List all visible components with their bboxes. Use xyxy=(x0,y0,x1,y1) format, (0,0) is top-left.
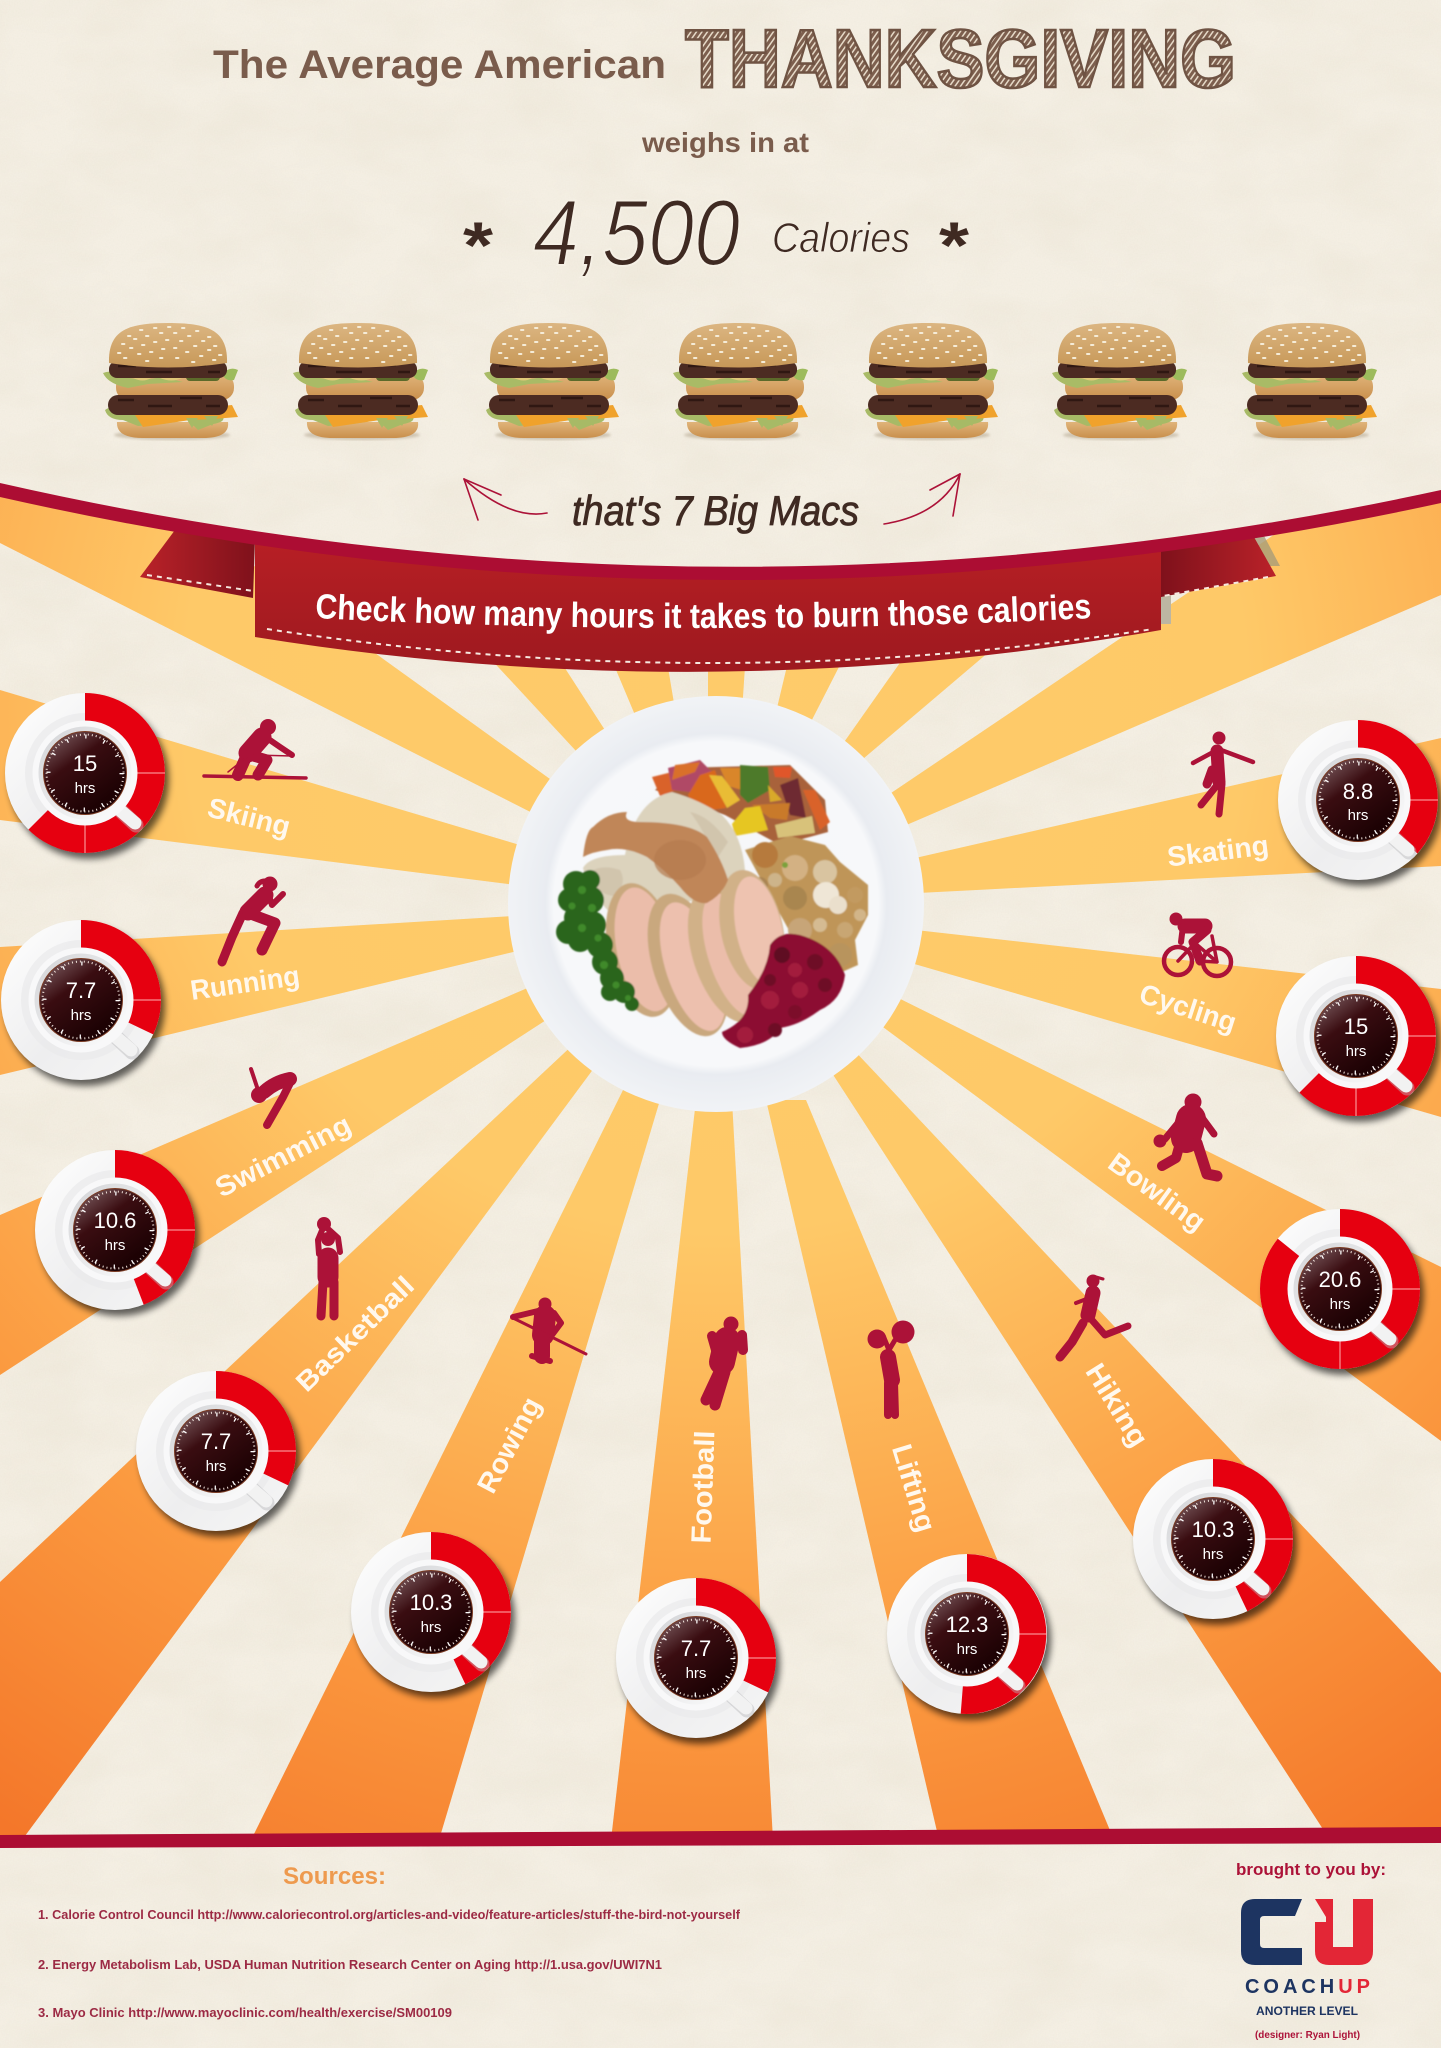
ribbon tail: right xyxy=(1161,530,1280,624)
calorie count xyxy=(463,180,969,285)
ribbon banner xyxy=(100,508,1320,672)
coffee cup gauge: 15 hrs xyxy=(1276,956,1440,1122)
icon: big mac 6 xyxy=(1052,323,1187,440)
panel: skating xyxy=(1165,720,1441,886)
mashed potatoes xyxy=(583,792,745,915)
arrow: left xyxy=(464,479,547,520)
panel: swimming xyxy=(35,1069,356,1316)
icon: basketball player xyxy=(317,1217,340,1316)
coffee cup gauge: 10.6 hrs: 10.6 xyxy=(94,1208,136,1233)
panel: basketball xyxy=(136,1217,420,1537)
label: Football: Football xyxy=(686,1430,720,1544)
ribbon main panel xyxy=(255,544,1161,672)
coffee cup gauge: 8.8 hrs xyxy=(1278,720,1441,886)
coffee cup gauge: 10.3 hrs xyxy=(1133,1459,1297,1625)
coffee cup gauge: 10.3 hrs: 10.3 xyxy=(410,1590,452,1615)
food photo group xyxy=(556,760,868,1048)
label: Skating: Skating xyxy=(1165,829,1271,873)
banner heading xyxy=(315,618,1092,628)
coffee cup gauge: 15 hrs: hrs xyxy=(1346,1043,1366,1060)
calorie count: Calories xyxy=(772,214,910,261)
calorie count: * xyxy=(939,208,969,282)
label: Bowling: Bowling xyxy=(1103,1147,1211,1237)
gravy xyxy=(583,812,728,903)
coffee cup gauge: 20.6 hrs: 20.6 xyxy=(1319,1267,1361,1292)
label: Rowing: Rowing xyxy=(471,1392,547,1498)
panel: skiing xyxy=(5,693,306,859)
coffee cup gauge: 10.3 hrs xyxy=(351,1532,515,1698)
turkey slices xyxy=(595,864,795,1046)
source 3: 3. Mayo Clinic http://www.mayoclinic.com/health/exercise/SM00109 xyxy=(38,2006,452,2020)
source 1: 1. Calorie Control Council http://www.caloriecontrol.org/articles-and-video/feature-articles/stuff-the-bird-not-yourself xyxy=(38,1908,741,1922)
parsley xyxy=(556,870,639,1011)
coffee cup gauge: 8.8 hrs: 8.8 xyxy=(1343,779,1373,804)
icon: runner xyxy=(222,876,283,962)
label: Skiing: Skiing xyxy=(204,792,294,842)
coffee cup gauge: 7.7 hrs xyxy=(1,920,165,1086)
icon: skier xyxy=(204,719,306,778)
icon: big mac 7 xyxy=(1242,323,1377,440)
icon: weightlifter xyxy=(868,1320,914,1415)
panel: bowling xyxy=(1103,1094,1424,1375)
label: Hiking: Hiking xyxy=(1079,1358,1155,1452)
brought to you by: brought to you by: xyxy=(1236,1860,1386,1879)
icon: football player xyxy=(706,1316,743,1405)
sources block xyxy=(38,1863,741,2020)
icon: big mac 4 xyxy=(673,323,808,440)
panel: running xyxy=(1,876,302,1086)
title: THANKSGIVING: THANKSGIVING xyxy=(685,12,1236,105)
coffee cup gauge: 7.7 hrs: hrs xyxy=(206,1458,226,1475)
ribbon banner: Check how many hours it takes to burn those calories xyxy=(316,594,1090,634)
coffee cup gauge: 12.3 hrs xyxy=(887,1554,1051,1720)
plate of thanksgiving food xyxy=(508,696,924,1112)
source 2: 2. Energy Metabolism Lab, USDA Human Nutrition Research Center on Aging http://1.usa.gov/UWI7N1 xyxy=(38,1958,662,1972)
coffee cup gauge: 7.7 hrs: hrs xyxy=(686,1665,706,1682)
icon: rower xyxy=(513,1298,586,1361)
icon: big mac 1 xyxy=(103,323,238,440)
coffee cup gauge: 15 hrs: 15 xyxy=(73,751,97,776)
bottom crimson bar xyxy=(0,1827,1441,1848)
panel: lifting xyxy=(868,1320,1051,1720)
designer credit: (designer: Ryan Light) xyxy=(1255,2029,1360,2041)
calorie count: 4,500 xyxy=(533,180,740,285)
coffee cup gauge: 20.6 hrs: hrs xyxy=(1330,1296,1350,1313)
coffee cup gauge: 10.3 hrs: hrs xyxy=(421,1619,441,1636)
coffee cup gauge: 15 hrs: hrs xyxy=(75,780,95,797)
coffee cup gauge: 12.3 hrs: hrs xyxy=(957,1641,977,1658)
coffee cup gauge: 7.7 hrs: hrs xyxy=(71,1007,91,1024)
panel: rowing xyxy=(351,1298,586,1698)
icon: cyclist xyxy=(1164,912,1231,976)
label: Running: Running xyxy=(188,960,302,1006)
coffee cup gauge: 10.3 hrs: 10.3 xyxy=(1192,1517,1234,1542)
icon: hiker xyxy=(1060,1274,1128,1357)
label: Basketball: Basketball xyxy=(290,1270,420,1398)
icon: big mac 3 xyxy=(484,323,619,440)
crimson top curve xyxy=(0,483,1441,580)
tagline: ANOTHER LEVEL xyxy=(1256,2004,1358,2018)
coffee cup gauge: 7.7 hrs: 7.7 xyxy=(201,1429,231,1454)
cranberry sauce xyxy=(722,934,845,1048)
ribbon tail: left xyxy=(140,530,255,598)
coffee cup gauge: 10.3 hrs: hrs xyxy=(1203,1546,1223,1563)
vegetables xyxy=(652,760,830,845)
coffee cup gauge: 10.6 hrs: hrs xyxy=(105,1237,125,1254)
calorie count: * xyxy=(463,208,493,282)
icon: big mac 5 xyxy=(863,323,998,440)
panel: hiking xyxy=(1060,1274,1297,1625)
label: Lifting: Lifting xyxy=(886,1440,942,1536)
icon: diver xyxy=(251,1069,291,1125)
coffee cup gauge: 12.3 hrs: 12.3 xyxy=(946,1612,988,1637)
sponsor block xyxy=(1236,1860,1386,2041)
coffee cup gauge: 15 hrs: 15 xyxy=(1344,1014,1368,1039)
subtitle: weighs in at: weighs in at xyxy=(641,127,809,158)
panel: cycling xyxy=(1136,912,1440,1122)
coffee cup gauge: 15 hrs xyxy=(5,693,169,859)
coffee cup gauge: 8.8 hrs: hrs xyxy=(1348,807,1368,824)
panel: football xyxy=(616,1316,780,1744)
sunburst rays xyxy=(0,383,1441,1840)
logo wordmark: COACHUP xyxy=(1245,1976,1370,1998)
coffee cup gauge: 7.7 hrs xyxy=(616,1578,780,1744)
icon: big mac 2 xyxy=(293,323,428,440)
coffee cup gauge: 7.7 hrs xyxy=(136,1371,300,1537)
sources heading: Sources: xyxy=(283,1863,386,1890)
label: Swimming: Swimming xyxy=(210,1109,356,1203)
arrow: right xyxy=(884,474,960,524)
icon: skater xyxy=(1193,732,1253,814)
logo: CU xyxy=(1241,1899,1373,1965)
big macs row xyxy=(103,323,1377,440)
caption: that's 7 Big Macs: that's 7 Big Macs xyxy=(572,487,859,534)
coffee cup gauge: 10.6 hrs xyxy=(35,1150,199,1316)
label: Cycling: Cycling xyxy=(1136,978,1240,1038)
icon: bowler xyxy=(1154,1094,1217,1176)
title: The Average American: The Average American xyxy=(213,43,666,87)
coffee cup gauge: 7.7 hrs: 7.7 xyxy=(681,1636,711,1661)
coffee cup gauge: 20.6 hrs xyxy=(1260,1209,1424,1375)
stuffing xyxy=(745,836,868,975)
coffee cup gauge: 7.7 hrs: 7.7 xyxy=(66,978,96,1003)
